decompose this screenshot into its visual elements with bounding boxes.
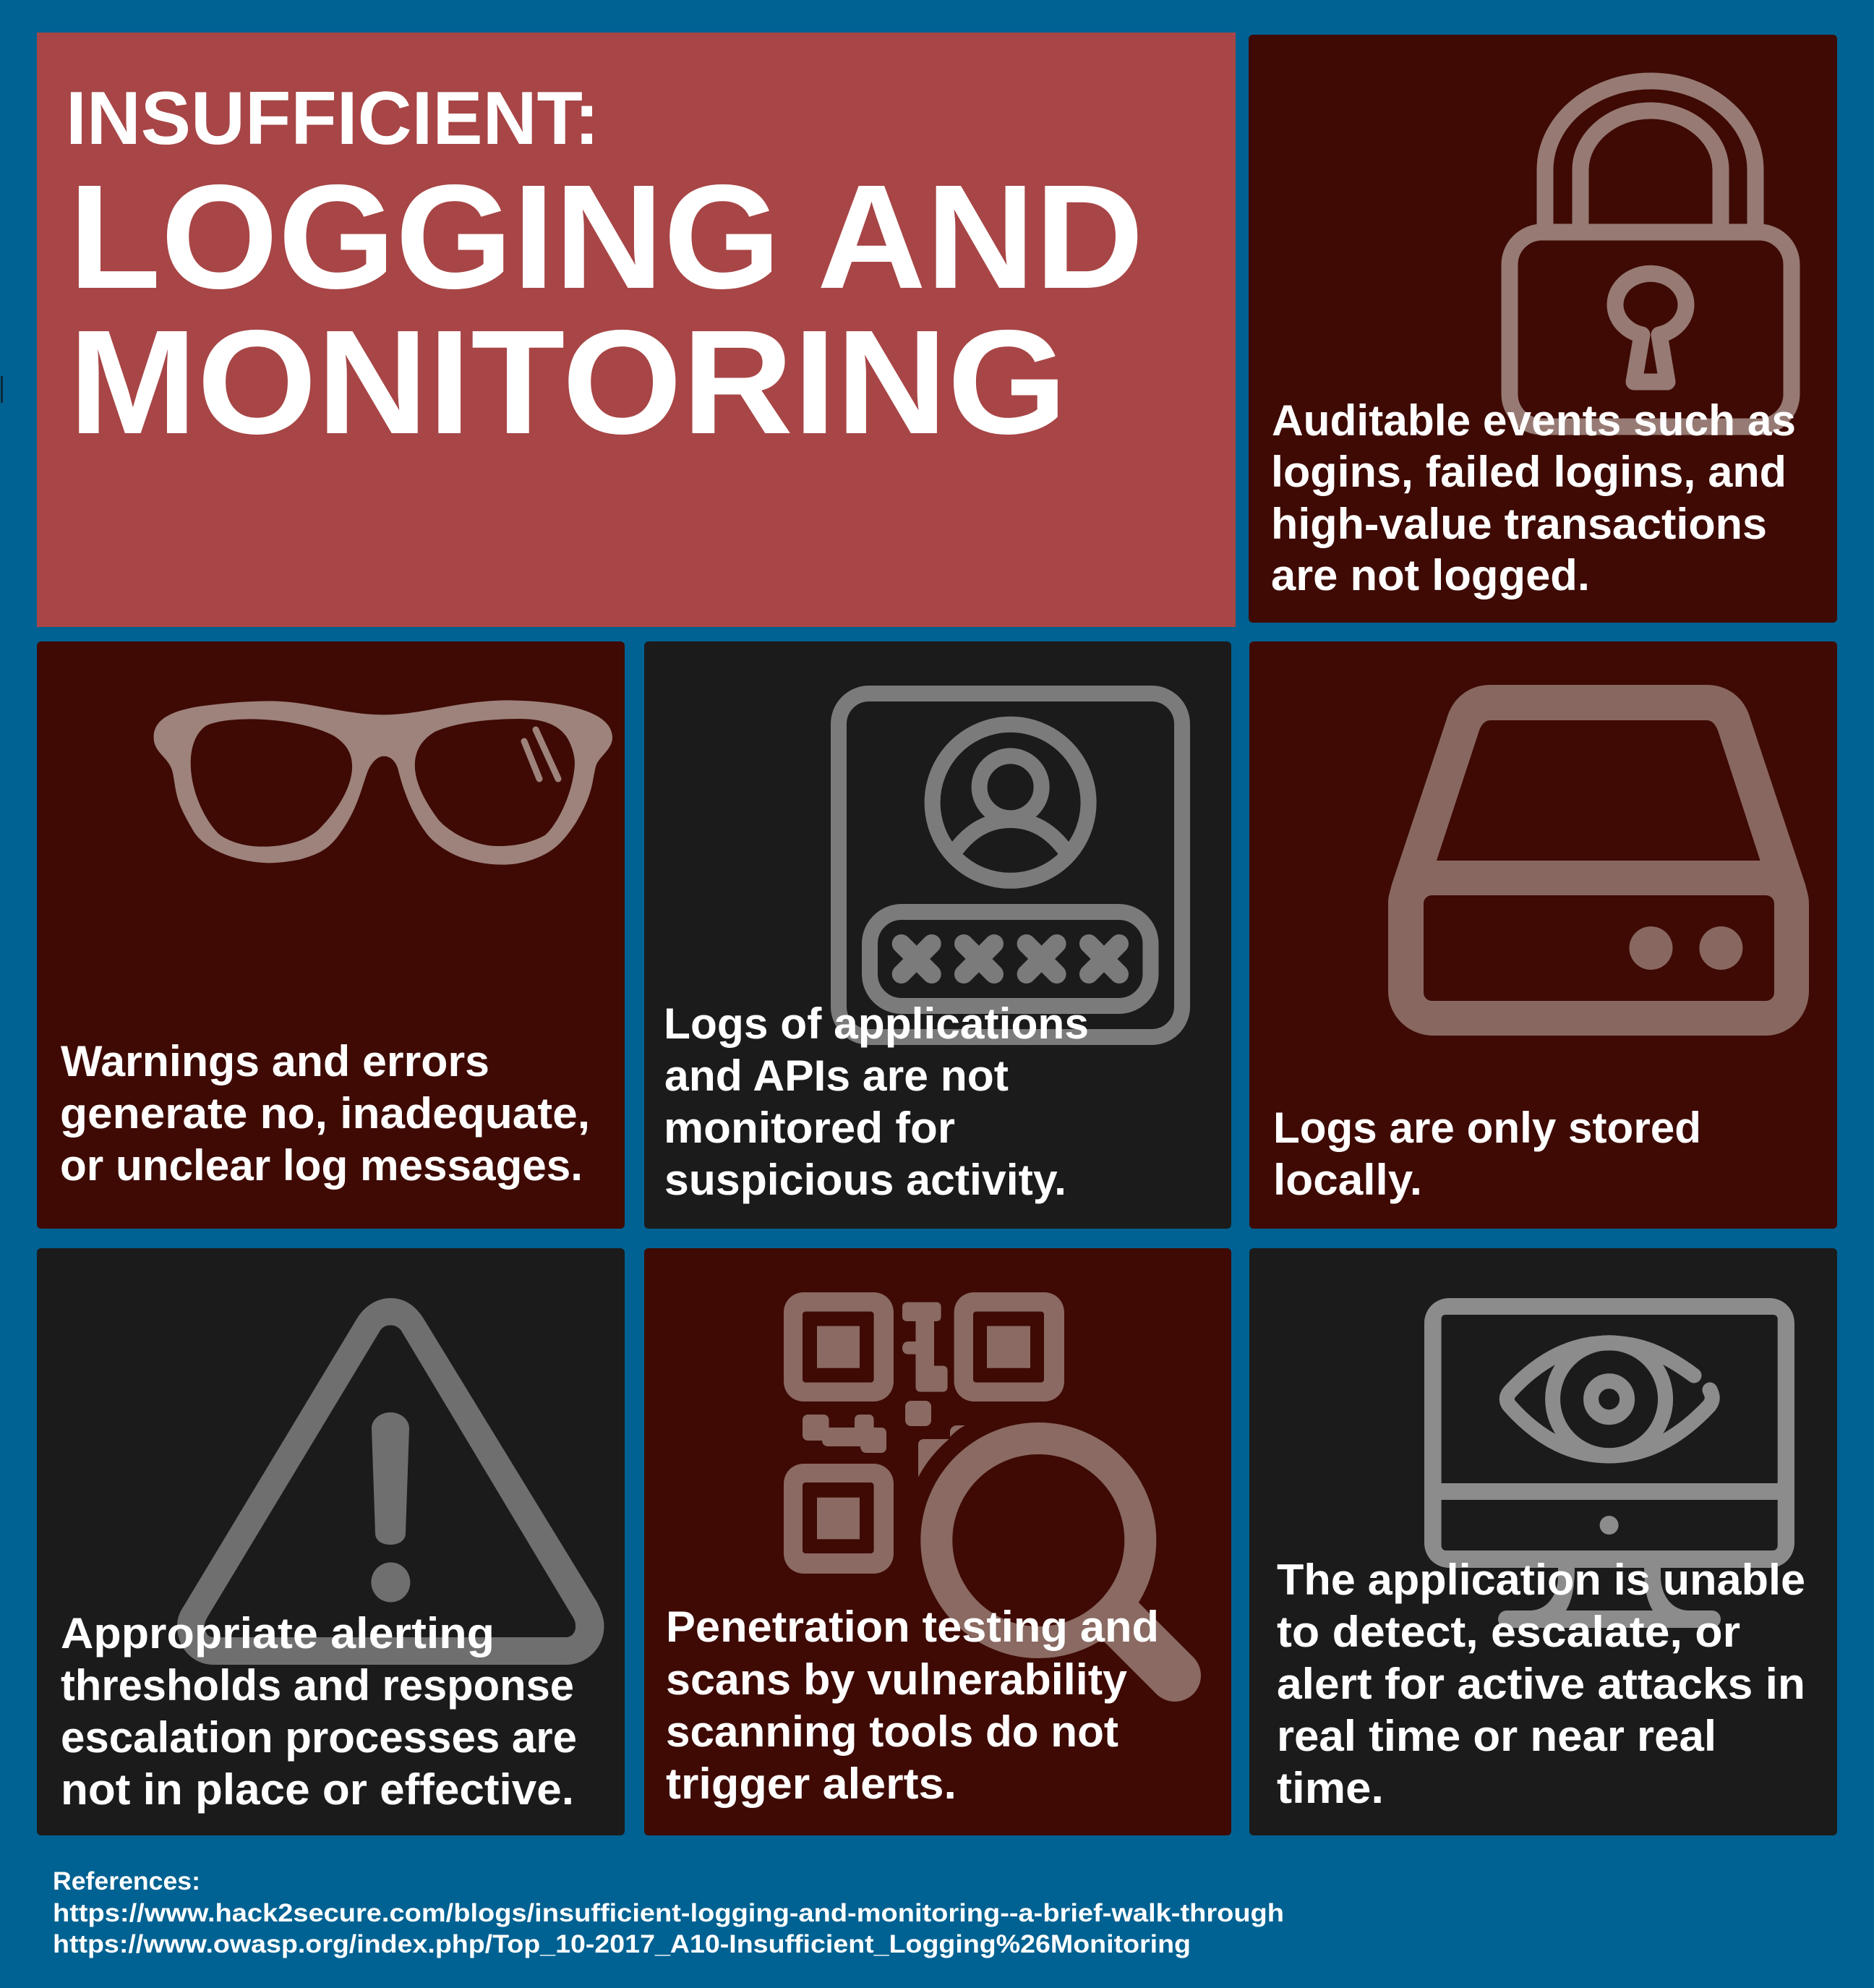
text: logs of applications: and APIs are not — [664, 1051, 1009, 1100]
text: penetration testing: trigger alerts. — [666, 1759, 957, 1808]
text: application unable to detect: The application is unable — [1277, 1556, 1805, 1604]
panel: logs of applications — [644, 641, 1231, 1229]
panel: title — [37, 33, 1236, 627]
text: warnings and errors — [60, 1037, 590, 1190]
text: logs stored locally — [1273, 1104, 1701, 1204]
panel: auditable events — [1249, 35, 1837, 623]
icon: monitor with eye — [1424, 1298, 1794, 1628]
text: auditable events: high-value transactions — [1271, 500, 1767, 548]
text: logs of applications: suspicious activity. — [664, 1156, 1066, 1204]
text: alerting thresholds: thresholds and response — [61, 1661, 574, 1710]
text: warnings and errors: Warnings and errors — [61, 1037, 489, 1085]
text: auditable events — [1271, 396, 1796, 600]
panel: penetration testing — [644, 1248, 1231, 1835]
panel: application unable to detect — [1249, 1248, 1837, 1835]
text: logs stored locally: Logs are only stored — [1273, 1104, 1701, 1152]
references — [53, 1867, 1284, 1958]
text: application unable to detect: real time or near real — [1277, 1712, 1716, 1760]
references: https://www.hack2secure.com/blogs/insufficient-logging-and-monitoring--a-brief-walk-through — [53, 1899, 1284, 1927]
text: warnings and errors: generate no, inadequate, — [60, 1089, 590, 1138]
text: warnings and errors: or unclear log messages. — [60, 1141, 583, 1190]
text: alerting thresholds: Appropriate alerting — [61, 1609, 495, 1658]
panel: logs stored locally — [1249, 641, 1837, 1229]
title: monitoring: MONITORING — [69, 299, 1067, 465]
text: logs of applications: monitored for — [664, 1104, 955, 1152]
text: penetration testing — [666, 1603, 1159, 1808]
text: application unable to detect: time. — [1277, 1764, 1384, 1812]
icon: warning triangle — [177, 1298, 604, 1665]
icon: user login — [839, 694, 1182, 1037]
text: logs of applications: Logs of applications — [664, 999, 1089, 1048]
icon: glasses — [154, 700, 612, 865]
text: logs stored locally: locally. — [1273, 1156, 1422, 1204]
text: alerting thresholds — [61, 1609, 577, 1814]
text: penetration testing: Penetration testing and — [666, 1603, 1159, 1651]
text: alerting thresholds: not in place or effective. — [61, 1765, 574, 1814]
text: alerting thresholds: escalation processes are — [61, 1713, 577, 1762]
icon: padlock — [1510, 81, 1792, 427]
text: auditable events: Auditable events such as — [1272, 396, 1796, 445]
icon: QR code and magnifier — [784, 1292, 1201, 1702]
text: application unable to detect — [1277, 1556, 1805, 1812]
panel: warnings and errors — [37, 641, 625, 1229]
title: logging and: LOGGING AND — [69, 154, 1144, 320]
icon: hard drive — [1388, 685, 1809, 1036]
text: application unable to detect: alert for active attacks in — [1277, 1660, 1805, 1708]
references: References: — [53, 1867, 200, 1895]
text: auditable events: are not logged. — [1271, 551, 1590, 600]
text: logs of applications — [664, 999, 1089, 1204]
references: https://www.owasp.org/index.php/Top_10-2017_A10-Insufficient_Logging%26Monitoring — [53, 1930, 1191, 1958]
text: penetration testing: scanning tools do not — [666, 1707, 1118, 1756]
panel: alerting thresholds — [37, 1248, 625, 1835]
text: application unable to detect: to detect, escalate, or — [1277, 1608, 1740, 1656]
title: insufficient: INSUFFICIENT: — [66, 77, 599, 161]
text: auditable events: logins, failed logins, and — [1271, 448, 1787, 496]
text: penetration testing: scans by vulnerability — [666, 1655, 1128, 1704]
